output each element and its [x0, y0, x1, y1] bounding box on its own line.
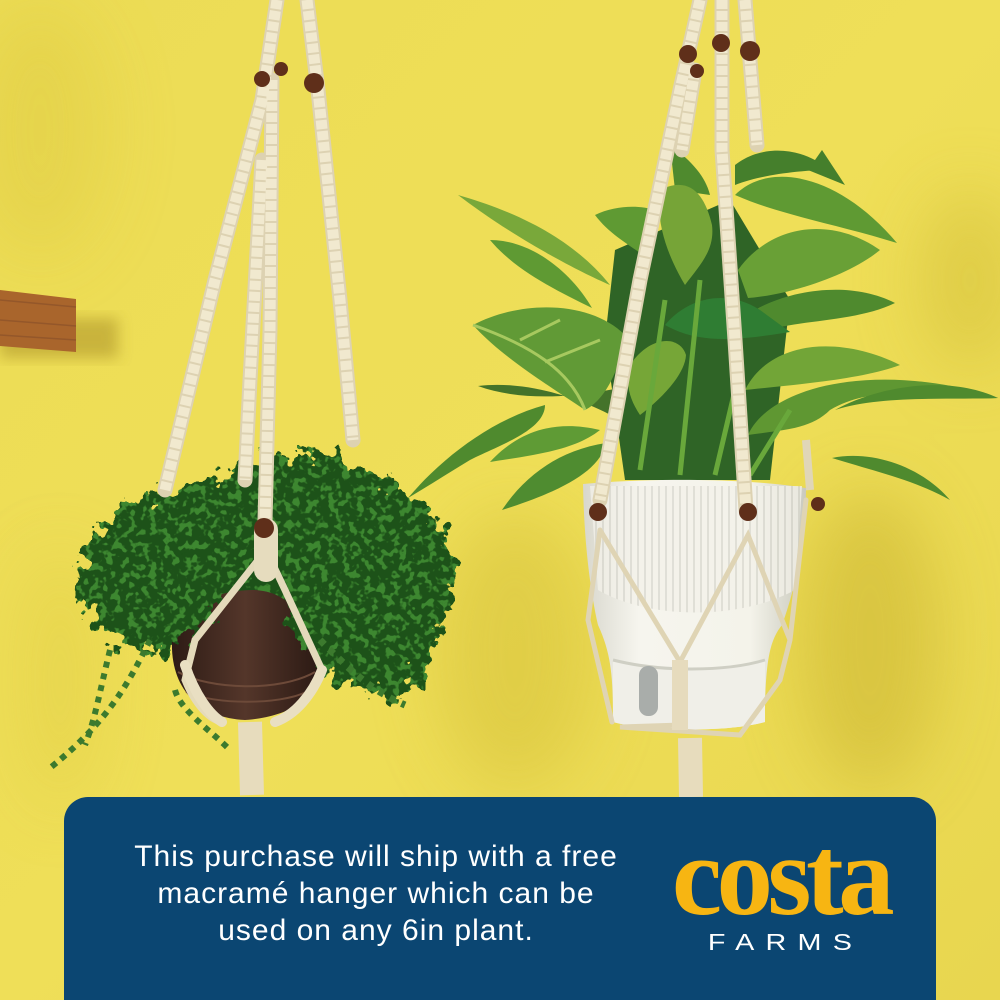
wooden shelf — [0, 290, 76, 352]
logo — [672, 814, 893, 955]
wooden shelf shadow — [0, 318, 118, 358]
message: used on any 6in plant. — [218, 914, 534, 947]
pot: brown — [172, 590, 318, 720]
wordmark costa: costa — [672, 814, 889, 939]
wooden beads — [254, 34, 825, 538]
message: macramé hanger which can be — [157, 877, 595, 910]
message: This purchase will ship with a free — [134, 840, 618, 873]
message — [134, 840, 618, 947]
small plant front foliage — [50, 533, 445, 768]
small plant back foliage — [78, 455, 453, 700]
wordmark farms: FARMS — [708, 929, 863, 955]
white pot — [583, 480, 806, 730]
macrame hanger left — [165, 0, 353, 795]
large plant leaves — [408, 145, 998, 510]
banner — [64, 797, 936, 1000]
macrame hanger right — [588, 0, 810, 797]
